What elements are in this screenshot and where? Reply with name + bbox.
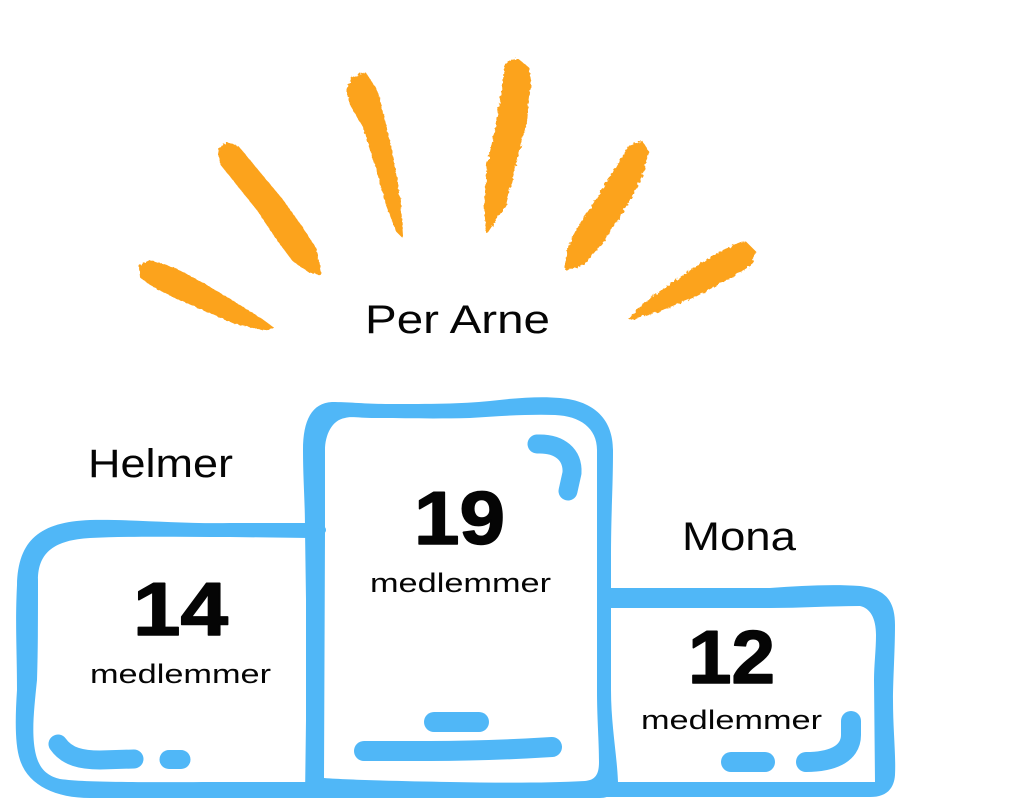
left block accent strokes [58, 744, 134, 760]
right block accent strokes [731, 752, 765, 772]
podium block: right, third place [605, 585, 895, 797]
right block outline [605, 585, 895, 797]
winner name: Per Arne: Per Arne [365, 298, 550, 342]
right block caption: medlemmer [641, 705, 822, 735]
ray 6 [630, 242, 755, 319]
left block outline [16, 520, 310, 798]
center block number: 19 [414, 476, 505, 560]
center block junction bump [318, 526, 326, 534]
ray 5 [566, 142, 648, 269]
center block caption: medlemmer [370, 568, 551, 598]
ray 2 [219, 143, 320, 274]
sunburst rays above winner [140, 59, 755, 329]
center block accent strokes [537, 444, 572, 491]
right block number: 12 [688, 615, 775, 699]
center block outline [303, 397, 618, 798]
podium block: left, second place [16, 520, 310, 798]
second place name: Helmer: Helmer [88, 442, 233, 486]
left block number: 14 [133, 567, 228, 651]
podium block: center, first place [303, 397, 618, 798]
left block caption: medlemmer [90, 659, 271, 689]
third place name: Mona: Mona [682, 515, 797, 559]
ray 1 [140, 261, 273, 329]
ray 4 [485, 59, 530, 232]
ray 3 [348, 73, 402, 236]
